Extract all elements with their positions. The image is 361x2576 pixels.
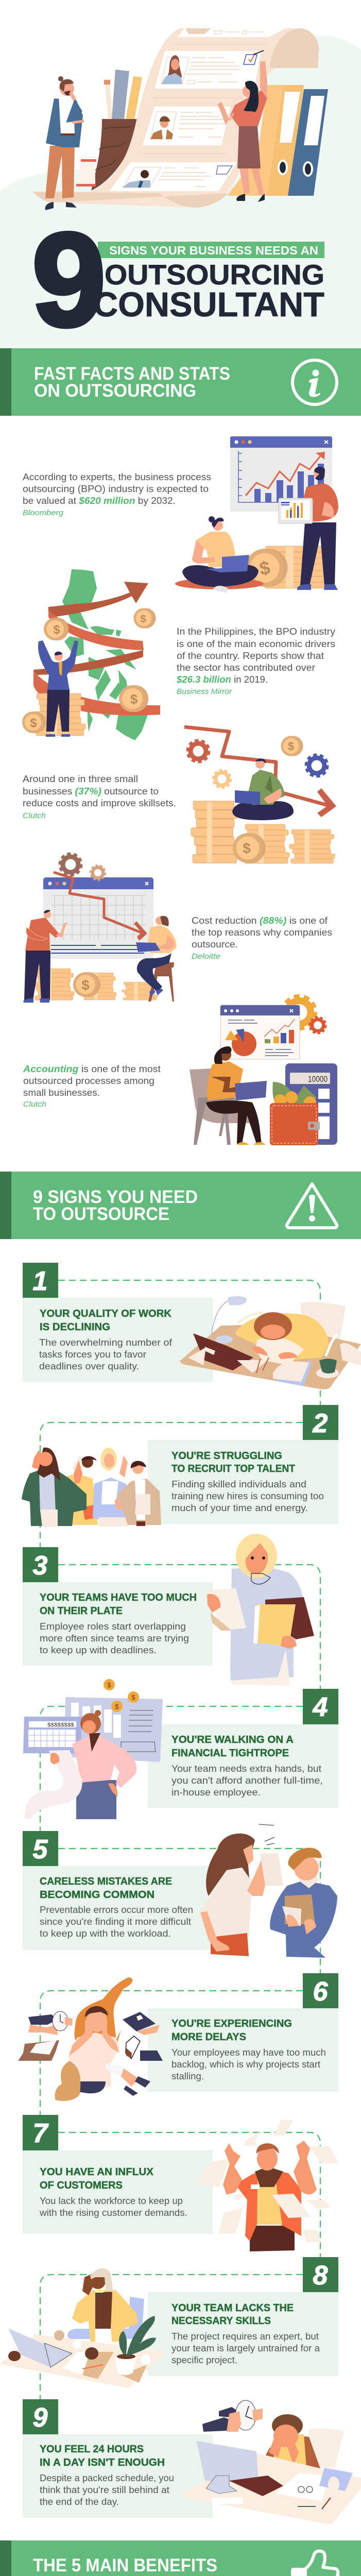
man pointing [23,910,68,1003]
heading [171,1734,294,1759]
body: with the rising customer demands. [39,2208,187,2218]
report window [220,1005,300,1059]
heading: YOU HAVE AN INFLUX [40,2166,154,2178]
title band [98,242,324,258]
woman [206,1046,267,1145]
heading: YOUR TEAMS HAVE TOO MUCH [40,1592,197,1603]
fact 3 text: Clutch [23,811,46,820]
man presenting [279,467,338,590]
falling arrow [184,727,332,806]
coins: $ [107,1681,111,1689]
title line 1: OUTSOURCING [105,259,324,291]
fact 1 text: Bloomberg [23,509,64,517]
body [40,1621,189,1655]
sign 1 illustration: exhausted worker at desk [180,1296,361,1389]
fact 1 text: According to experts, the business process [23,472,211,482]
number badge: 8 [313,2261,328,2291]
manager [200,1824,283,1956]
coins: $ [53,623,60,637]
coins: $ [115,1703,119,1710]
monitor [197,2441,259,2494]
coins: $ [131,1693,135,1701]
heading: CARELESS MISTAKES ARE [40,1876,172,1887]
heading: BECOMING COMMON [40,1889,154,1901]
tablet in hands [123,2012,160,2035]
heading: IN A DAY ISN'T ENOUGH [40,2457,165,2468]
employee [270,1848,337,1958]
coins [104,1679,139,1712]
coin stack [35,693,85,736]
body: Preventable errors occur more often [40,1905,193,1915]
phone and sheets [18,2036,163,2096]
heading [40,1876,172,1901]
man with glasses [114,1461,161,1526]
heading [40,1308,172,1333]
number badge: 2 [313,1409,328,1438]
desk [0,2334,166,2388]
heading [40,1592,197,1617]
woman on stool [136,916,177,1002]
body [39,1337,173,1371]
gears [60,854,105,880]
CV scroll paper [32,28,319,208]
body: deadlines over quality. [39,1361,139,1371]
coins: $ [81,977,90,993]
body: The project requires an expert, but [171,2331,319,2342]
sign 8 panel [148,2257,338,2376]
woman sitting with laptop [175,516,264,593]
heading: IS DECLINING [40,1321,110,1333]
icon: warning [287,1184,337,1228]
dashed connector path through the signs [40,1280,320,2399]
heading: YOUR TEAM LACKS THE [171,2302,294,2314]
body [40,1905,193,1939]
number badge [303,2257,338,2292]
fact 5 text: Clutch [23,1100,46,1109]
heading: THE 5 MAIN BENEFITS [33,2555,217,2575]
fact 2 text: $26.3 billion in 2019. [176,674,268,685]
fact 4 text: outsource. [192,939,238,950]
person [256,2414,322,2473]
heading: TO RECRUIT TOP TALENT [171,1463,295,1475]
number badge [303,1973,338,2008]
man celebrating [38,640,78,737]
hero illustration: recruiter reviewing CV scroll [32,28,328,210]
number badge: 6 [313,1977,329,2007]
body: Finding skilled individuals and [171,1479,306,1489]
heading [40,2166,154,2191]
person [55,2006,119,2101]
fact 1 text [23,472,211,517]
body [171,2047,326,2081]
office chair [67,2297,144,2339]
man [223,2141,317,2251]
title kicker: SIGNS YOUR BUSINESS NEEDS AN [109,244,318,257]
desk items [211,2468,353,2509]
section banner: fast facts [0,348,361,416]
fact 3 illustration: costs falling [184,727,336,863]
growth ribbon arrow [33,582,160,715]
body [171,2331,320,2365]
fact 3 text: businesses (37%) outsource to [23,786,159,796]
big number 9: 9 [32,205,106,354]
body: You lack the workforce to keep up [40,2196,183,2206]
long receipt [25,1750,82,1819]
heading [40,2444,165,2468]
sign 3 panel [23,1547,213,1666]
chair [304,2429,344,2468]
sign 3 illustration: woman with files [207,1534,314,1686]
sign 5 illustration: boss and employee [200,1824,337,1958]
arrowhead [134,921,147,941]
coins [246,546,332,588]
coins [22,608,156,733]
fact 3 text [23,774,176,820]
heading: 9 SIGNS YOU NEED [33,1187,198,1207]
fact 2 illustration: Philippines growth [22,569,160,740]
number badge [303,1405,338,1440]
desk [181,2453,361,2524]
fact 5 text [23,1064,161,1109]
fact 4 illustration: falling chart [23,854,177,1003]
man [72,2268,138,2344]
gears [188,736,327,787]
coins: $ [30,716,37,730]
coins: $ [140,614,146,625]
fact 2 text: the sector has contributed over [177,663,315,673]
man thinking [45,76,84,210]
number badge: 3 [33,1551,48,1581]
woman [72,1710,136,1819]
arrowhead [317,788,336,817]
section banner: 9 signs [0,1172,361,1239]
woman ticking the CV [217,50,267,202]
fact 3 text: reduce costs and improve skillsets. [23,798,176,808]
body: stalling. [171,2071,204,2081]
body: since you're finding it more difficult [40,1917,191,1927]
body: think that you're still behind at [40,2485,169,2495]
heading: OF CUSTOMERS [40,2180,123,2191]
sign 2 panel [148,1405,338,1524]
sign 7 panel [23,2115,213,2234]
chart window [230,436,332,512]
falling arrow [54,872,144,934]
sign 2 illustration: overloaded team [22,1448,161,1527]
icon: pencil cup with ruler [76,70,142,191]
body: Your team needs extra hands, but [171,1764,321,1774]
number badge: 7 [33,2119,49,2148]
body: to keep up with the workload. [40,1928,171,1939]
body: you can't afford another full-time, [171,1775,323,1786]
stress splash [75,1977,132,2048]
body [171,1764,323,1798]
calendar window [43,877,153,959]
woman holding head [22,1448,87,1527]
fact 5 illustration: accounting [190,997,337,1145]
icon: thumbs up [291,2551,339,2576]
body: The overwhelming number of [39,1337,173,1348]
heading: YOU'RE WALKING ON A [171,1734,294,1745]
number badge [23,1263,58,1298]
section banner: 9 signs: TO OUTSOURCE [33,1204,169,1224]
number badge [23,1831,58,1866]
number badge: 4 [313,1692,328,1722]
fact 2 text: Business Mirror [177,687,232,696]
number badge [23,2115,58,2150]
armchair [190,1069,257,1145]
fact 4 text [192,916,332,961]
title line 2: CONSULTANT [93,285,324,324]
paper and crumpled notes [8,2330,151,2383]
clock in hands [202,2400,263,2432]
clock in hands [28,2011,73,2035]
fact 5 text: Accounting is one of the most [23,1064,161,1074]
heading: NECESSARY SKILLS [171,2315,271,2327]
heading: YOU'RE EXPERIENCING [171,2018,292,2029]
gears: $ [288,740,294,753]
sign 1 panel [23,1263,213,1382]
number badge: 1 [33,1266,47,1296]
fact 1 text: outsourcing (BPO) industry is expected to [23,484,209,494]
blonde colleague [93,1448,129,1527]
sign 5 panel [23,1831,213,1950]
sign 9 panel [23,2399,213,2518]
body: Employee roles start overlapping [40,1621,186,1632]
body: backlog, which is why projects start [171,2059,320,2070]
heading: ON THEIR PLATE [40,1605,123,1617]
wallet with cash [270,1082,320,1145]
coins [33,969,158,1000]
fact 4 text: Cost reduction (88%) is one of [192,916,328,926]
sign 9 illustration: overwhelmed worker [181,2400,361,2524]
heading: YOU FEEL 24 HOURS [40,2444,144,2455]
sign 4 panel [148,1689,338,1808]
calculator card: $$$$$$$$ [47,1722,75,1728]
body: training new hires is consuming too [171,1491,324,1501]
finance report [64,1697,163,1762]
fact 2 text: is one of the main economic drivers [177,639,335,649]
fact 1 illustration: growth chart [175,436,338,593]
fact 2 text [176,626,335,696]
map of the Philippines [46,569,149,740]
fact 1 text: be valued at $620 million by 2032. [23,496,176,506]
number badge: 9 [33,2403,48,2433]
heading [171,2302,294,2327]
body: to keep up with deadlines. [40,1645,157,1655]
sign 8 illustration: confused worker at desk [0,2268,166,2388]
heading [171,2018,292,2043]
body: much of your time and energy. [171,1503,308,1513]
fact 2 text: In the Philippines, the BPO industry [177,626,335,637]
coin stacks: $ [243,840,251,856]
body [171,1479,324,1513]
fact 5 text: outsourced processes among [23,1076,154,1086]
gears [284,997,325,1033]
sign 6 illustration: stressed worker [18,1977,163,2101]
heading: FAST FACTS AND STATS [34,364,230,384]
number badge: 5 [33,1835,48,1865]
coin stacks [191,801,335,863]
body [40,2473,174,2507]
papers [196,2120,338,2242]
coins: $ [130,691,138,707]
heading: MORE DELAYS [171,2031,246,2043]
body: Your employees may have too much [171,2047,326,2058]
fact 5 text: small businesses. [23,1088,100,1098]
body: the end of the day. [40,2497,119,2507]
number badge [23,1547,58,1582]
heading: YOU'RE STRUGGLING [171,1450,282,1462]
title [32,205,324,354]
colleague with file [67,1455,99,1525]
heading [171,1450,295,1475]
fact 4 text: Deloitte [192,952,220,961]
body: tasks forces you to favor [39,1349,146,1360]
man with laptop [232,758,294,820]
sign 6 panel [148,1973,338,2092]
body [39,2196,187,2218]
icon: binders [228,85,328,196]
heading: FINANCIAL TIGHTROPE [171,1748,289,1759]
coins: $ [258,557,272,579]
body: specific project. [171,2355,237,2365]
fact 2 text: of the country. Reports show that [177,651,324,661]
body: your team is largely untrained for a [171,2343,320,2353]
section banner: fast facts: ON OUTSOURCING [34,381,196,401]
fact 3 text: Around one in three small [23,774,138,784]
calculator: 10000 [308,1074,328,1084]
sign 4 illustration: woman checking bills [23,1679,163,1819]
hero background blob [0,36,361,348]
body: more often since teams are trying [40,1633,189,1643]
body: in-house employee. [171,1787,261,1798]
icon: information [293,360,337,404]
sign 7 illustration: man among flying papers [196,2120,338,2251]
fact 4 text: the top reasons why companies [192,927,332,938]
section banner: benefits [0,2540,361,2576]
body: Despite a packed schedule, you [40,2473,174,2483]
calculator card [23,1717,82,1754]
laptop [8,2328,72,2367]
calculator [285,1063,337,1145]
number badge [23,2399,58,2434]
number badge [303,1689,338,1724]
heading: YOUR QUALITY OF WORK [40,1308,172,1319]
potted plant [115,2316,156,2375]
